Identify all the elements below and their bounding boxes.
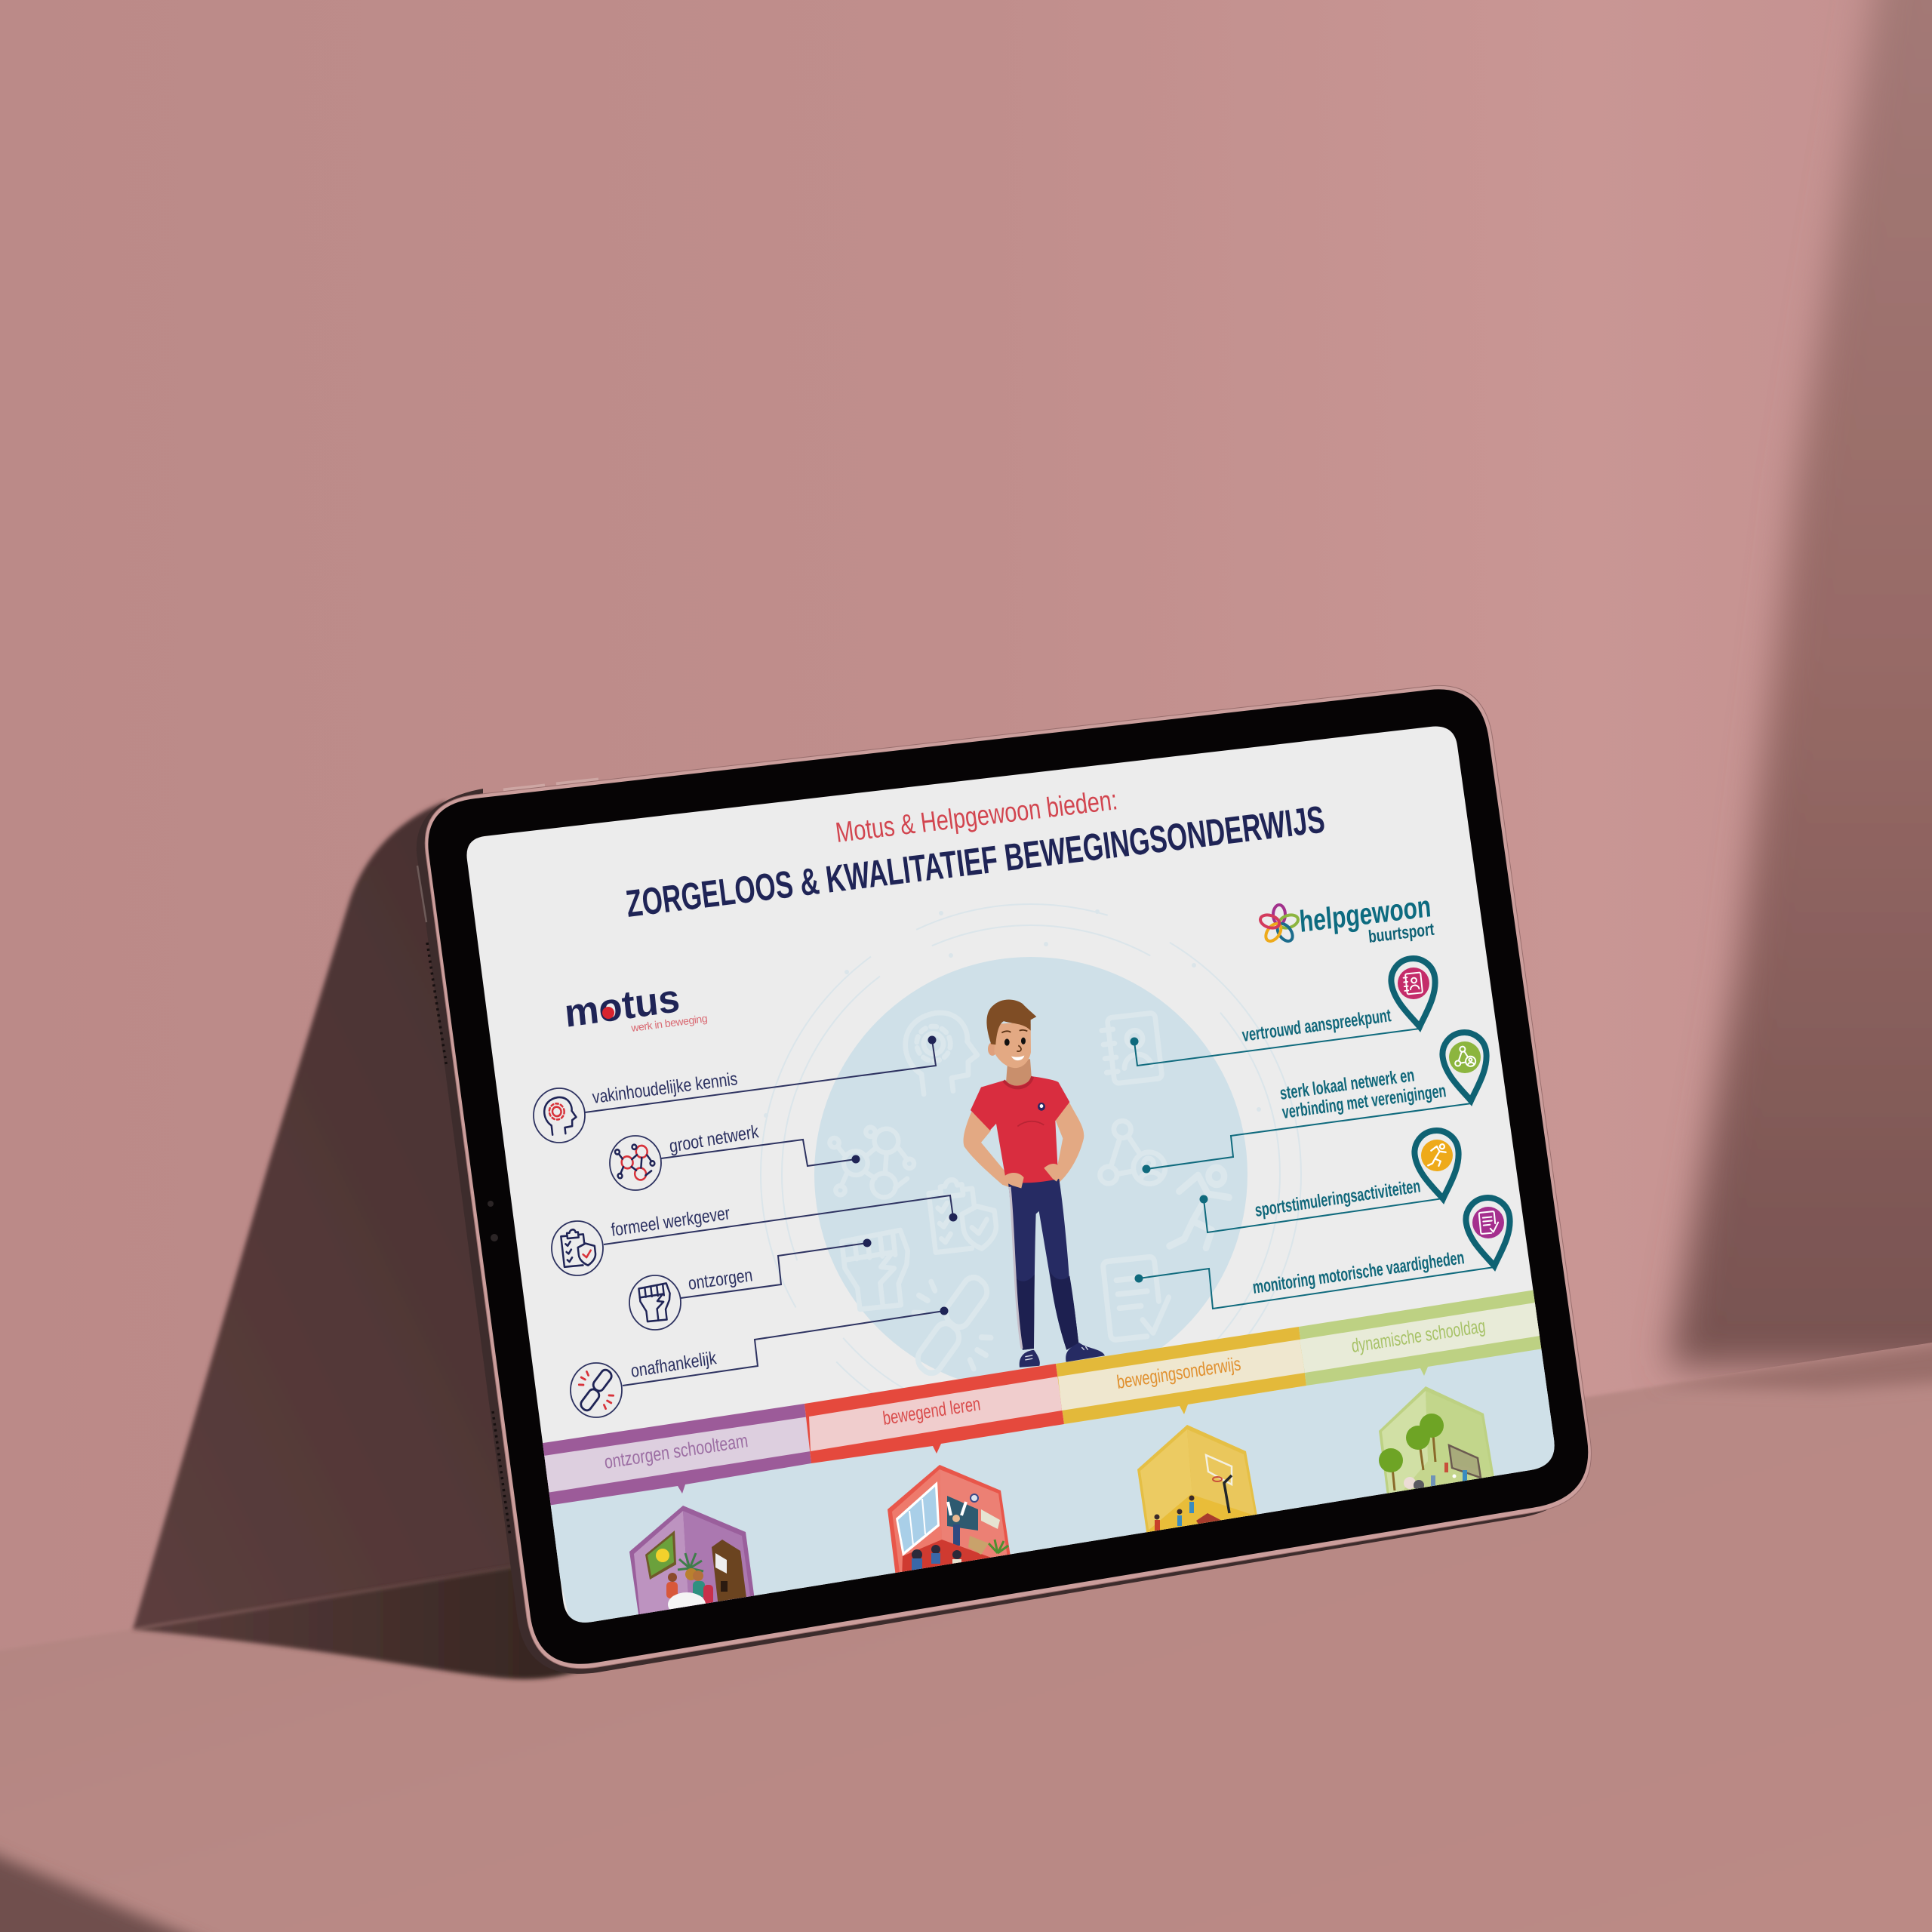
purple house walls	[629, 1506, 761, 1645]
item: onafhankelijk	[571, 1307, 948, 1417]
gym floor	[1146, 1494, 1256, 1543]
house: ontzorgen schoolteam	[629, 1506, 761, 1645]
big blue circle	[814, 957, 1247, 1392]
picture frame with lemon	[645, 1531, 676, 1580]
lawn	[1390, 1460, 1494, 1506]
item: formeel werkgever: formeel werkgever	[610, 1203, 731, 1241]
segment: dynamische schooldag: dynamische schooldag	[1350, 1315, 1487, 1357]
red house walls	[888, 1465, 1016, 1607]
item: groot netwerk: groot netwerk	[668, 1121, 760, 1157]
watermark: document	[1103, 1256, 1173, 1340]
pants	[1008, 1179, 1078, 1350]
item: sterk lokaal netwerk	[1143, 1029, 1493, 1173]
right list: helpgewoon offer	[1131, 955, 1516, 1309]
item: sterk lokaal netwerk: sterk lokaal netwerk en	[1278, 1065, 1416, 1104]
tablet camera dots	[488, 1201, 498, 1241]
logo: helpgewoon buurtsport	[1259, 889, 1435, 946]
segment: ontzorgen schoolteam: ontzorgen schoolteam	[603, 1430, 749, 1473]
logo: motus	[562, 977, 708, 1036]
children	[1404, 1463, 1467, 1491]
segment: dynamische schooldag	[1299, 1287, 1562, 1386]
tablet rose gold rim	[425, 685, 1591, 1669]
watermark: clipboard	[928, 1176, 998, 1254]
pants stripe	[1010, 1187, 1022, 1349]
pupils	[912, 1545, 961, 1571]
watermark icons in circle	[829, 1009, 1234, 1380]
item: vertrouwd aanspreekpunt: vertrouwd aanspreekpunt	[1241, 1005, 1392, 1046]
yellow house walls	[1137, 1425, 1259, 1547]
shelf	[981, 1509, 1000, 1529]
people around table	[668, 1573, 677, 1582]
shadow: tablet cast on wall	[133, 801, 547, 1629]
watermark: head	[902, 1009, 981, 1096]
person illustration	[964, 1000, 1105, 1367]
segment: bewegend leren	[804, 1364, 1064, 1463]
watermark: runner	[1161, 1167, 1234, 1251]
brows and nose	[1001, 1030, 1027, 1051]
ribbon	[528, 1287, 1562, 1507]
item: onafhankelijk: onafhankelijk	[629, 1348, 718, 1382]
shadow: window shadow on wall, upper right	[1669, 0, 1932, 1366]
neck	[1005, 1059, 1032, 1095]
item: vakinhoudelijke kennis	[534, 1035, 936, 1143]
item: sportstimuleringsactiviteiten: sportstimuleringsactiviteiten	[1254, 1176, 1422, 1221]
tablet body edge	[417, 691, 1586, 1674]
window	[896, 1481, 940, 1556]
clock	[971, 1494, 978, 1502]
buurtsport wordmark: buurtsport	[1367, 919, 1435, 946]
hair	[986, 1000, 1036, 1044]
desk	[968, 1536, 989, 1555]
motus wordmark: motus	[562, 977, 681, 1036]
trees	[1392, 1426, 1435, 1491]
lower blue area	[543, 1348, 1570, 1638]
players	[1155, 1496, 1194, 1531]
screen background	[453, 709, 1570, 1638]
segment: bewegingsonderwijs	[1056, 1327, 1306, 1424]
left arm	[964, 1112, 1024, 1189]
plant	[989, 1540, 1008, 1553]
tablet black bezel	[428, 689, 1588, 1664]
main title: ZORGELOOS & KWALITATIEF BEWEGINGSONDERWIJS	[623, 798, 1327, 925]
item: monitoring motorische vaardigheden: monitoring motorische vaardigheden	[1251, 1247, 1466, 1298]
item: vakinhoudelijke kennis: vakinhoudelijke kennis	[591, 1069, 739, 1108]
screen	[453, 709, 1570, 1645]
item: formeel werkgever	[552, 1195, 957, 1275]
blackboard	[947, 1496, 978, 1531]
segment: bewegend leren: bewegend leren	[881, 1393, 982, 1429]
right arm	[1044, 1102, 1084, 1182]
backboard	[1206, 1455, 1232, 1484]
tablet speaker grilles	[427, 943, 510, 1537]
segment: ontzorgen schoolteam	[528, 1404, 811, 1507]
collar	[1004, 1076, 1032, 1088]
motus tagline: werk in beweging	[629, 1012, 708, 1034]
house: dynamische schooldag	[1379, 1386, 1496, 1508]
red mat	[1196, 1513, 1226, 1532]
shadow: band on floor, right	[1675, 1343, 1932, 1395]
teacher	[953, 1524, 960, 1546]
segment: bewegingsonderwijs: bewegingsonderwijs	[1115, 1353, 1242, 1393]
right shoe	[1066, 1343, 1105, 1362]
tablet	[417, 685, 1591, 1674]
item: monitoring motorische vaardigheden	[1135, 1195, 1516, 1309]
hands	[1001, 1164, 1063, 1189]
face	[994, 1023, 1031, 1068]
shirt logo	[1038, 1103, 1045, 1111]
item: sportstimuleringsactiviteiten	[1200, 1128, 1465, 1232]
smile	[1011, 1056, 1024, 1060]
shoe laces	[1025, 1346, 1088, 1360]
football goal	[1449, 1445, 1481, 1478]
motus red dot	[602, 1007, 614, 1019]
watermark: chain	[912, 1275, 993, 1376]
shirt fold	[1017, 1121, 1044, 1126]
subtitle: Motus & Helpgewoon bieden:	[834, 783, 1119, 848]
house: bewegingsonderwijs	[1137, 1425, 1259, 1547]
shadow: tablet cast on floor	[133, 1561, 596, 1679]
item: sterk lokaal netwerk: verbinding met verenigingen	[1281, 1081, 1447, 1123]
tablet top buttons	[503, 780, 598, 790]
watermark: network	[829, 1123, 918, 1203]
left shoe	[1020, 1350, 1040, 1367]
left list: motus offer	[534, 1035, 957, 1417]
vending machine	[712, 1540, 747, 1607]
item: ontzorgen: ontzorgen	[687, 1265, 754, 1294]
house: bewegend leren	[888, 1465, 1016, 1607]
background: floor surface	[0, 1340, 1932, 1932]
shins	[1014, 1270, 1078, 1350]
eyes	[1004, 1038, 1010, 1046]
tablet side button	[417, 866, 426, 922]
item: vertrouwd aanspreekpunt	[1131, 955, 1441, 1066]
green house walls	[1379, 1386, 1496, 1508]
helpgewoon wordmark: helpgewoon	[1298, 889, 1432, 939]
t-shirt	[971, 1076, 1069, 1183]
basketball pole	[1224, 1475, 1232, 1513]
hoop	[1213, 1477, 1222, 1481]
ear	[988, 1042, 997, 1056]
item: groot netwerk	[610, 1121, 860, 1190]
watermark: nodes	[1097, 1118, 1168, 1186]
concentric arcs	[761, 904, 1301, 1444]
item: ontzorgen	[629, 1239, 871, 1330]
plant	[678, 1553, 703, 1571]
shadow: bottom-left corner	[0, 1826, 283, 1932]
floor	[901, 1540, 1014, 1604]
watermark: fist	[841, 1229, 914, 1310]
helpgewoon flower mark	[1259, 905, 1300, 944]
watermark: notebook	[1100, 1013, 1162, 1084]
